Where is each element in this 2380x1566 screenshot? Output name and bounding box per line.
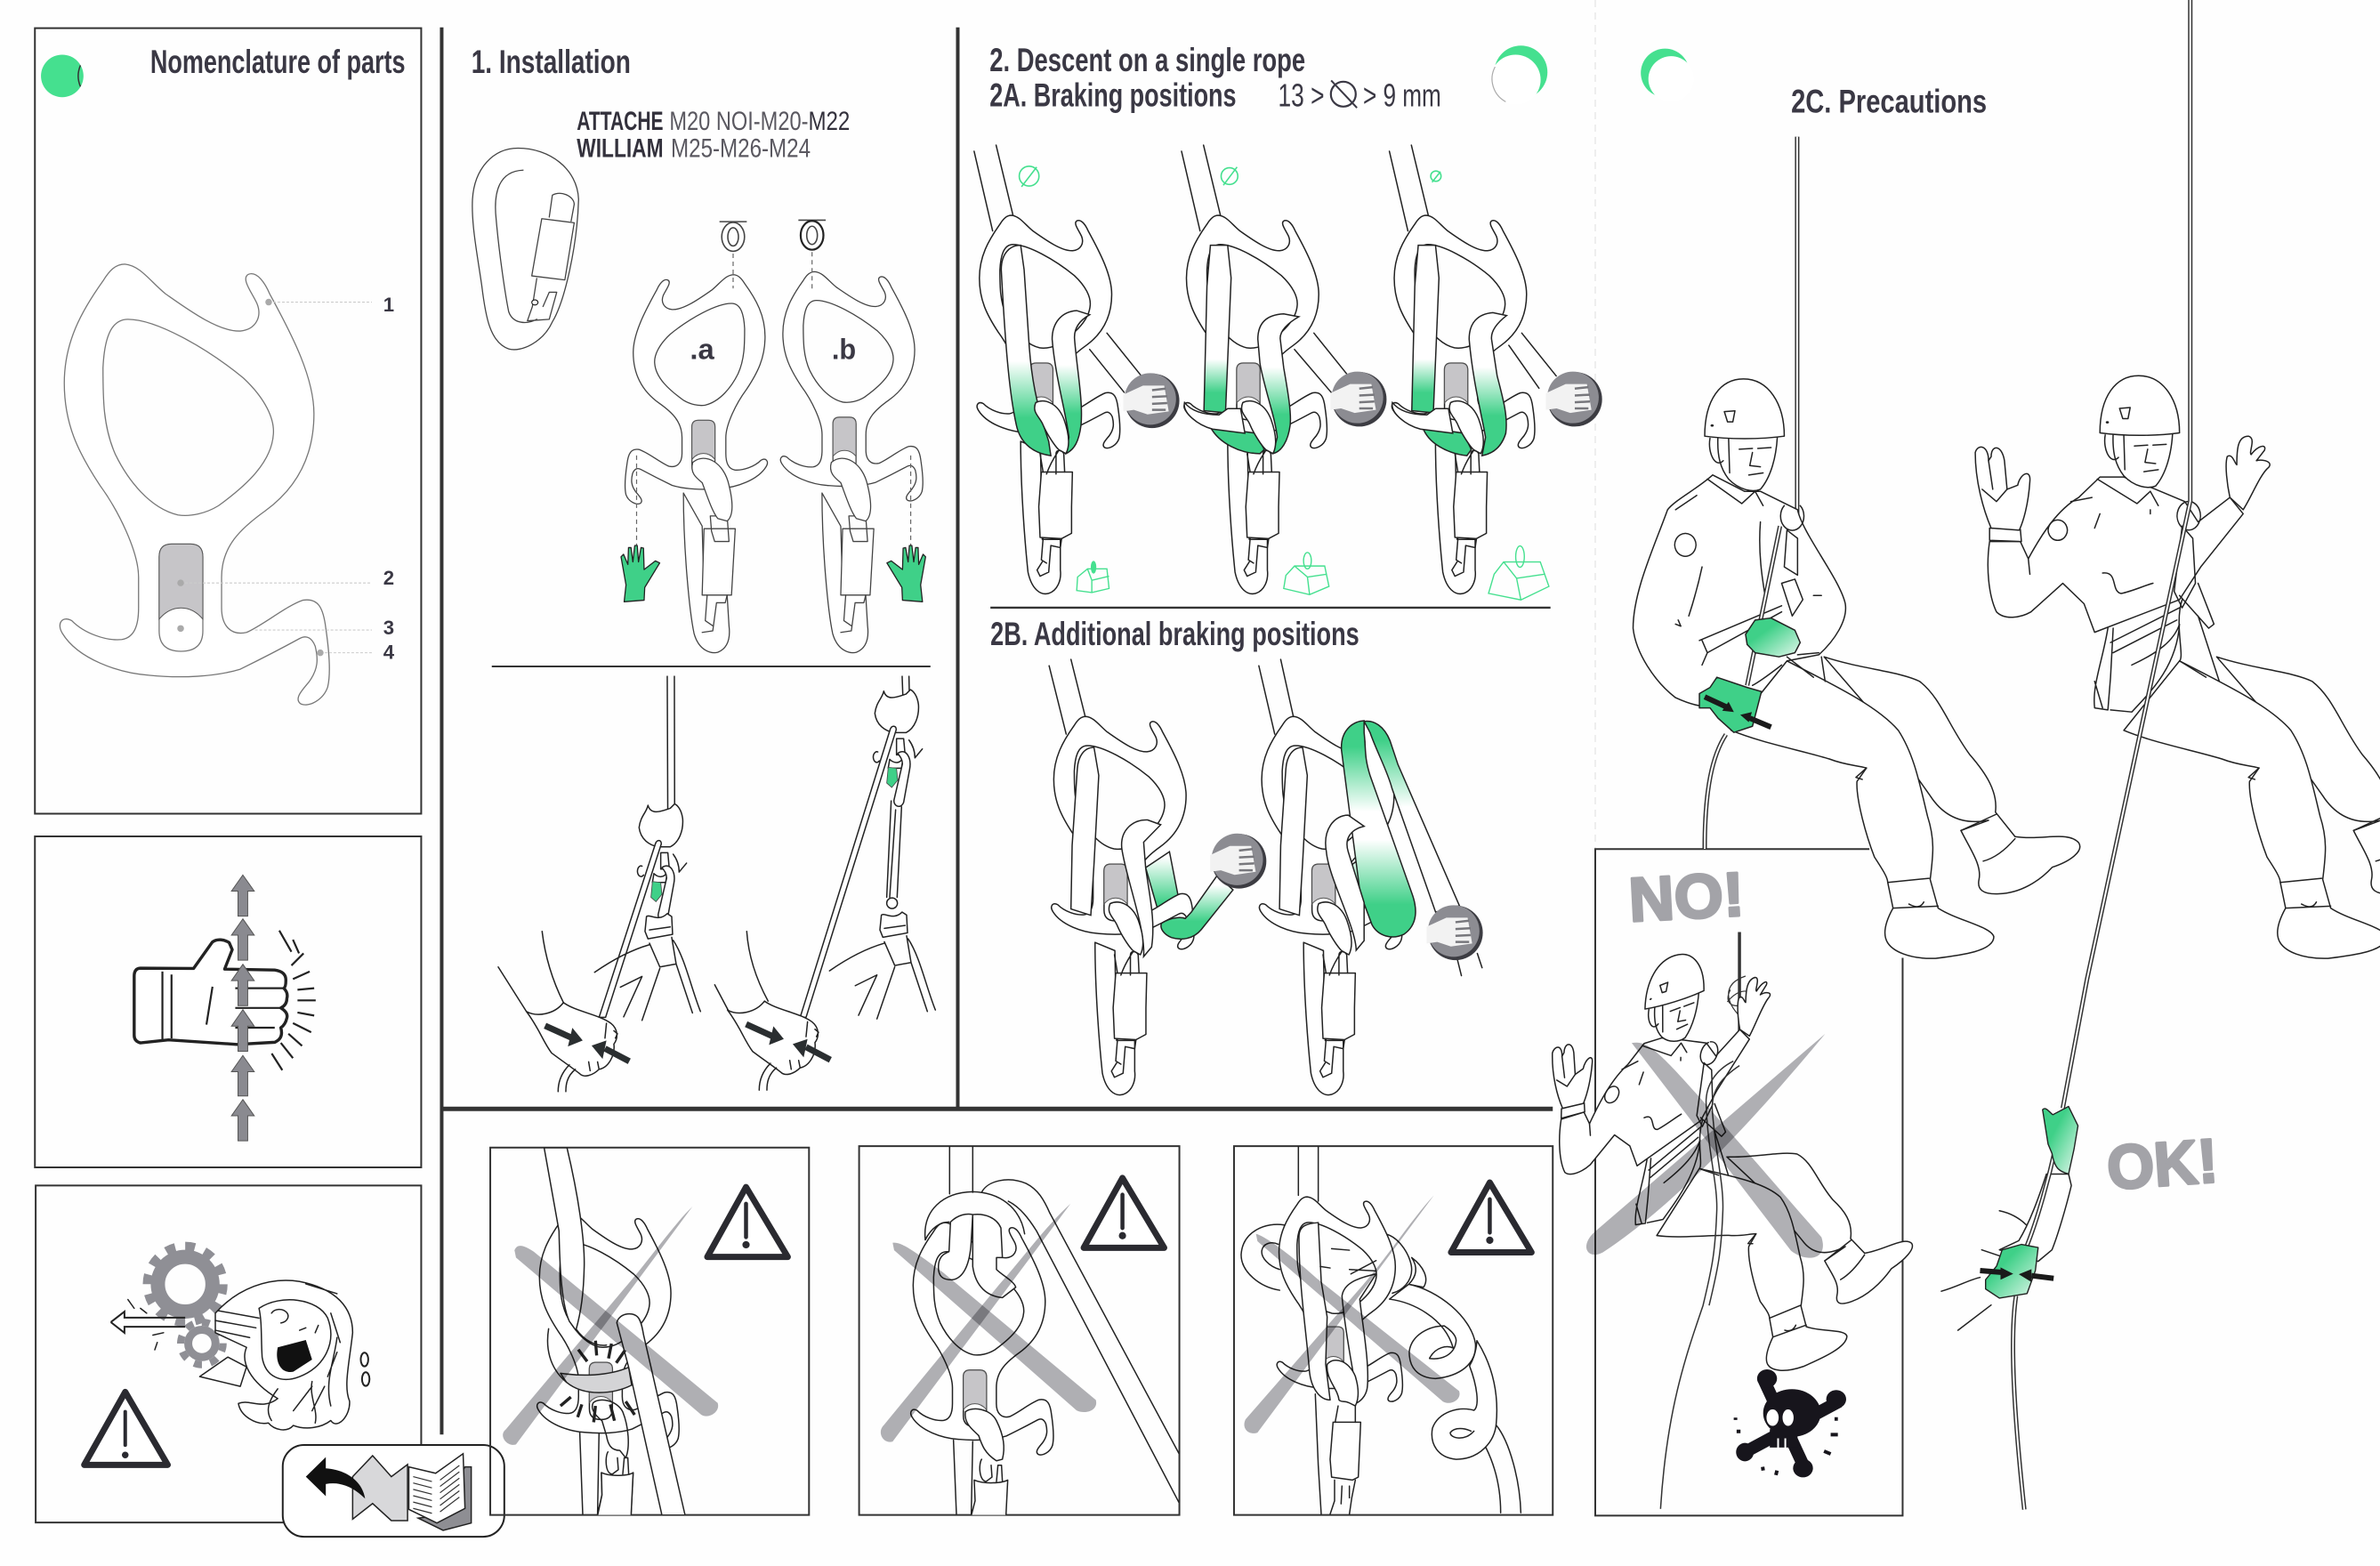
callout: refer to the instructions bbox=[283, 1445, 504, 1537]
part callouts: 3 bbox=[383, 617, 394, 639]
panel: caution moving parts bbox=[36, 1185, 421, 1522]
heading: nomenclature of parts: Nomenclature of parts bbox=[150, 44, 406, 80]
illustration: climber hands free bbox=[1975, 0, 2380, 1108]
icon: left green glove bbox=[621, 545, 659, 601]
heading: braking positions: 2A. Braking positions bbox=[989, 77, 1237, 113]
part callouts: 1 bbox=[383, 294, 394, 316]
heading: precautions: 2C. Precautions bbox=[1791, 83, 1987, 119]
panel: gloved hand and rope bbox=[35, 836, 421, 1167]
icon: warning triangle bbox=[1084, 1178, 1164, 1247]
rope diameter range: 13 > bbox=[1278, 77, 1324, 113]
icons: weights bbox=[1077, 546, 1549, 600]
illustration: climber losing control bbox=[1542, 879, 1922, 1509]
diagram: additional braking position 2 bbox=[1259, 659, 1483, 1095]
icon: green crescent marker bbox=[1490, 45, 1547, 105]
part callouts: 4 bbox=[383, 641, 395, 663]
icon: warning triangle bbox=[707, 1187, 787, 1257]
illustration: climber correct grip bbox=[1634, 137, 2080, 958]
text: carabiner models: M25-M26-M24 bbox=[671, 134, 811, 164]
illustration: hand locking rope, right bbox=[714, 676, 935, 1090]
heading: installation: 1. Installation bbox=[472, 44, 631, 80]
icon: glove bbox=[134, 940, 287, 1045]
illustration: screaming head caught by hair bbox=[128, 1280, 369, 1430]
cross-out mark bbox=[1244, 1195, 1460, 1433]
icon: right green glove bbox=[887, 545, 925, 601]
icon: arrow back bbox=[306, 1457, 365, 1498]
heading: descent on a single rope: 2. Descent on a single rope bbox=[989, 42, 1305, 78]
text: ok: OK! bbox=[2105, 1126, 2220, 1203]
rope diameter range: > 9 mm bbox=[1363, 77, 1441, 113]
panel: nomenclature of parts bbox=[35, 28, 421, 813]
icon: pressure rays bbox=[271, 931, 316, 1070]
rope diameter range bbox=[1278, 77, 1441, 113]
text: no: NO! bbox=[1627, 860, 1746, 934]
section: descent on a single rope bbox=[974, 42, 1602, 1095]
text: carabiner models: WILLIAM bbox=[577, 134, 664, 164]
icon: skull and crossbones bbox=[1736, 1369, 1846, 1477]
icon: green crescent marker bbox=[1641, 49, 1694, 101]
section: precautions bbox=[1542, 0, 2380, 1515]
heading: additional braking positions: 2B. Additional braking positions bbox=[990, 616, 1359, 652]
icon: open book bbox=[408, 1454, 472, 1530]
panel: no bbox=[1595, 849, 1902, 1515]
panel: incorrect use 3 bbox=[1234, 1146, 1553, 1515]
icon: warning triangle bbox=[1451, 1183, 1531, 1252]
icon: gears bbox=[147, 1247, 223, 1365]
diagram: braking position 2 bbox=[1182, 145, 1386, 593]
part callouts: 2 bbox=[383, 567, 394, 589]
diagram: installation b: .b bbox=[832, 334, 856, 366]
diameter icons bbox=[1020, 166, 1441, 187]
diagram: braking position 3 bbox=[1390, 145, 1602, 593]
diagram: installation a: .a bbox=[690, 334, 715, 366]
text: carabiner models: M20 NOI-M20- bbox=[669, 107, 808, 136]
device diagram bbox=[60, 264, 329, 705]
text: carabiner models: M22 bbox=[808, 107, 850, 136]
part callouts bbox=[177, 294, 395, 663]
text: carabiner models: ATTACHE bbox=[577, 107, 664, 136]
dashed alignment guides bbox=[636, 252, 911, 546]
icon: carabiner bbox=[472, 149, 578, 350]
diagram: braking position 1 bbox=[974, 145, 1180, 593]
diagram: additional braking position 1 bbox=[1049, 659, 1266, 1095]
illustration: correct hand hold on rope bbox=[1941, 1107, 2078, 1510]
text: carabiner models bbox=[577, 107, 850, 164]
icon: brochure bbox=[352, 1456, 407, 1521]
arrows: rope running upward bbox=[231, 875, 254, 1141]
panel: incorrect use 1 bbox=[490, 1148, 809, 1515]
icon: glove seams bbox=[163, 972, 284, 1040]
cross-out mark bbox=[1586, 1034, 1825, 1258]
diagram: installation b bbox=[780, 271, 923, 653]
icon: warning triangle bbox=[85, 1392, 168, 1465]
cross-out mark bbox=[503, 1207, 718, 1445]
illustration: hand locking rope, left bbox=[498, 676, 700, 1092]
anchor rings bbox=[720, 220, 826, 251]
section: installation bbox=[472, 44, 935, 1092]
cross-out mark bbox=[881, 1204, 1096, 1442]
diagram: installation a bbox=[625, 275, 767, 653]
icon: green section marker bbox=[41, 54, 84, 97]
panel: incorrect use 2 bbox=[859, 1146, 1180, 1515]
arrow: pulled in bbox=[111, 1312, 185, 1333]
